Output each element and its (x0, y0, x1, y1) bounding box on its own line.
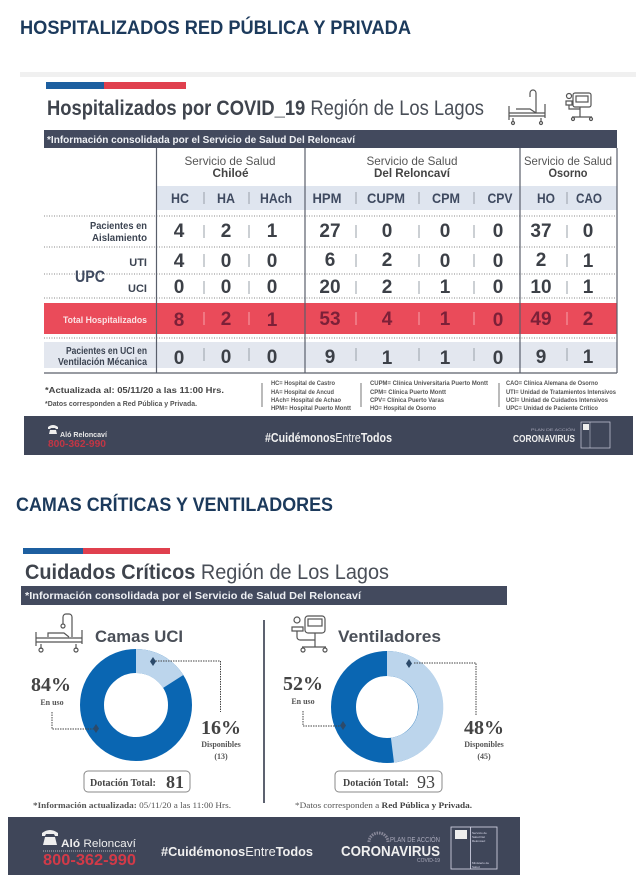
footer band bottom: Aló Reloncaví (61, 838, 136, 850)
footer band bottom: #CuidémonosEntreTodos (161, 844, 313, 859)
column header band: CPV (488, 190, 513, 206)
donut chart: ventiladores (344, 651, 443, 763)
data table: 9 (536, 347, 546, 368)
ventilacion band (44, 342, 617, 368)
data table: 0 (440, 221, 450, 242)
data table: 0 (493, 251, 503, 272)
heading: ventiladores: Ventiladores (338, 627, 441, 646)
service headers: Servicio de Salud (524, 154, 612, 168)
data table: 0 (221, 347, 231, 368)
data table: 1 (267, 221, 278, 242)
data table: 10 (530, 277, 552, 298)
callout: 48 disponibles (406, 659, 504, 761)
data table: 4 (174, 251, 185, 272)
data table: 0 (221, 251, 231, 272)
data table: 0 (382, 221, 392, 242)
column header band: HO (537, 190, 555, 206)
footer band bottom: COVID-19 (417, 858, 440, 864)
data table: 0 (174, 277, 184, 298)
data table: 0 (583, 221, 593, 242)
data table: 0 (267, 251, 277, 272)
info bar (44, 130, 617, 148)
callout: 16 disponibles: (13) (214, 752, 228, 761)
legend: abbreviations: UTI= Unidad de Tratamientos Intensivos (506, 390, 617, 396)
panel: cuidados criticos (8, 548, 520, 875)
data table: 1 (440, 277, 451, 298)
legend: abbreviations: CAO= Clínica Alemana de Osorno (506, 381, 598, 387)
footer band top: 800-362-990 (48, 439, 106, 450)
service headers: Servicio de Salud (184, 154, 276, 168)
legend: abbreviations: CPV= Clínica Puerto Varas (370, 398, 445, 404)
row labels: Total Hospitalizados (63, 315, 147, 325)
info bar (21, 586, 507, 605)
icon: phone (42, 830, 58, 845)
column header band: HAch (260, 190, 292, 206)
data table: 0 (267, 277, 277, 298)
data table: 53 (319, 309, 341, 330)
title: camas criticas: CAMAS CRÍTICAS Y VENTILADORES (16, 493, 333, 516)
footer band bottom: Salud (472, 865, 480, 869)
data table: 1 (583, 277, 594, 298)
legend: abbreviations (262, 381, 617, 412)
footer band bottom: 800-362-990 (43, 852, 136, 869)
icon: ventilator (566, 93, 592, 120)
data table: 0 (221, 277, 231, 298)
data table: 4 (174, 221, 185, 242)
data table: 0 (493, 277, 503, 298)
data table: 1 (440, 309, 451, 330)
footer band bottom: Salud Del (472, 835, 485, 839)
footer band top: PLAN DE ACCIÓN (531, 427, 575, 432)
data table: 1 (440, 348, 451, 369)
panel: hospitalizados infographic (20, 72, 636, 455)
data table: 0 (174, 348, 184, 369)
legend: abbreviations: CUPM= Clínica Universitaria Puerto Montt (370, 381, 488, 387)
callout: 16 disponibles: Disponibles (201, 740, 241, 749)
legend: abbreviations: HC= Hospital de Castro (271, 381, 335, 387)
data table: 6 (325, 250, 335, 271)
legend: abbreviations: CPM= Clínica Puerto Montt (370, 390, 446, 396)
footer band bottom: Ministerio de (472, 861, 489, 865)
row labels: UPC (75, 267, 105, 286)
callout: 48 disponibles: 48% (464, 717, 504, 739)
footer band top: Aló Reloncaví (60, 430, 108, 439)
callout: 52 en uso (283, 673, 346, 730)
data table: 20 (319, 277, 341, 298)
heading: cuidados criticos: Cuidados Críticos Región de Los Lagos (25, 561, 389, 584)
divider (263, 620, 265, 803)
icon: ventilator (292, 616, 327, 652)
callout: 84 en uso: 84% (31, 674, 71, 696)
data table: 2 (221, 309, 231, 330)
footer band bottom (8, 817, 520, 875)
update note: *Actualizada al: 05/11/20 a las 11:00 Hrs. (45, 385, 224, 395)
callout: 16 disponibles: 16% (201, 717, 241, 739)
footer band bottom: Reloncaví (472, 839, 486, 843)
icon: phone (48, 425, 58, 434)
callout: 52 en uso: 52% (283, 673, 323, 695)
row labels: Aislamiento (92, 233, 147, 244)
title: hospitalizados: HOSPITALIZADOS RED PÚBLICA Y PRIVADA (20, 17, 411, 39)
data table: 2 (221, 221, 231, 242)
row labels (58, 221, 147, 368)
callout: 16 disponibles (150, 657, 241, 761)
footer band top: #CuidémonosEntreTodos (265, 431, 392, 445)
legend: abbreviations: HO= Hospital de Osorno (370, 406, 436, 412)
data table: 1 (267, 310, 278, 331)
info bar: *Información consolidada por el Servicio de Salud Del Reloncaví (25, 590, 362, 602)
service headers: Del Reloncaví (374, 166, 451, 180)
row labels: Pacientes en (90, 221, 147, 232)
data table: 0 (493, 348, 503, 369)
icon: bed (36, 614, 82, 652)
service headers (184, 154, 612, 180)
data table: 49 (530, 309, 552, 330)
callout: 84 en uso (31, 674, 99, 733)
data table (174, 221, 594, 369)
box: dotacion total 93 (335, 771, 442, 792)
row labels: Ventilación Mécanica (58, 357, 147, 368)
data table: 2 (382, 277, 392, 298)
flag stripe top (46, 82, 186, 89)
data table: 2 (583, 309, 593, 330)
column header band: CAO (576, 190, 602, 206)
legend: abbreviations: UPC= Unidad de Paciente Crítico (506, 406, 598, 412)
data table: 27 (319, 221, 341, 242)
row dividers (44, 216, 617, 338)
column header band: CUPM (367, 190, 405, 206)
table rules (44, 148, 617, 373)
total hospitalizados band (44, 303, 617, 334)
legend: abbreviations: HPM= Hospital Puerto Montt (271, 406, 351, 412)
column header band: HPM (312, 190, 342, 206)
callout: 48 disponibles: (45) (477, 752, 491, 761)
data table: 9 (325, 347, 335, 368)
footer band bottom: PLAN DE ACCIÓN (390, 835, 440, 844)
box: dotacion total 81: Dotación Total: (90, 778, 156, 789)
update note: *Datos corresponden a Red Pública y Privada. (45, 401, 197, 408)
legend: abbreviations: UCI= Unidad de Cuidados Intensivos (506, 398, 609, 404)
data table: 0 (267, 347, 277, 368)
panel: camas uci (31, 614, 241, 810)
note: informacion actualizada: *Información actualizada: 05/11/20 a las 11:00 Hrs. (33, 801, 231, 810)
data table: 1 (583, 251, 594, 272)
callout: 48 disponibles: Disponibles (464, 740, 504, 749)
footer band top (24, 416, 633, 455)
heading: camas uci: Camas UCI (95, 627, 183, 646)
panel: ventiladores (283, 616, 504, 810)
box: dotacion total 81 (84, 771, 190, 792)
data table: 0 (493, 310, 503, 331)
box: dotacion total 93: Dotación Total: (343, 778, 409, 789)
legend: abbreviations: HA= Hospital de Ancud (271, 390, 334, 396)
service headers: Osorno (548, 166, 588, 180)
data table: 2 (382, 250, 392, 271)
service headers: Chiloé (212, 166, 249, 180)
note: datos: *Datos corresponden a Red Pública y Privada. (295, 801, 472, 810)
footer band top: CORONAVIRUS (513, 434, 575, 445)
callout: 84 en uso: En uso (40, 698, 64, 707)
info bar: *Información consolidada por el Servicio de Salud Del Reloncaví (47, 135, 356, 146)
data table: 37 (530, 221, 552, 242)
donut chart: camas uci (92, 649, 183, 749)
column header band: HC (171, 190, 189, 206)
column header band: HA (217, 190, 235, 206)
row labels: Pacientes en UCI en (66, 346, 147, 357)
footer band bottom: Servicio de (472, 831, 487, 835)
footer band bottom: CORONAVIRUS (341, 843, 440, 860)
data table: 0 (440, 251, 450, 272)
service headers: Servicio de Salud (366, 154, 458, 168)
column header band: CPM (432, 190, 460, 206)
data table: 8 (174, 310, 184, 331)
data table: 1 (583, 347, 594, 368)
column header band (157, 186, 617, 210)
data table: 2 (536, 250, 546, 271)
icon: bed (509, 90, 545, 124)
legend: abbreviations: HAch= Hospital de Achao (271, 398, 341, 404)
heading: hospitalizados por covid: Hospitalizados por COVID_19 Región de Los Lagos (47, 97, 484, 120)
data table: 4 (382, 309, 393, 330)
row labels: UTI (129, 257, 147, 269)
row labels: UCI (128, 283, 147, 295)
box: dotacion total 81: 81 (166, 772, 184, 792)
data table: 0 (493, 221, 503, 242)
flag stripe bottom (23, 548, 170, 554)
callout: 52 en uso: En uso (291, 697, 315, 706)
data table: 1 (382, 348, 393, 369)
box: dotacion total 93: 93 (417, 772, 435, 792)
update note (45, 385, 224, 408)
